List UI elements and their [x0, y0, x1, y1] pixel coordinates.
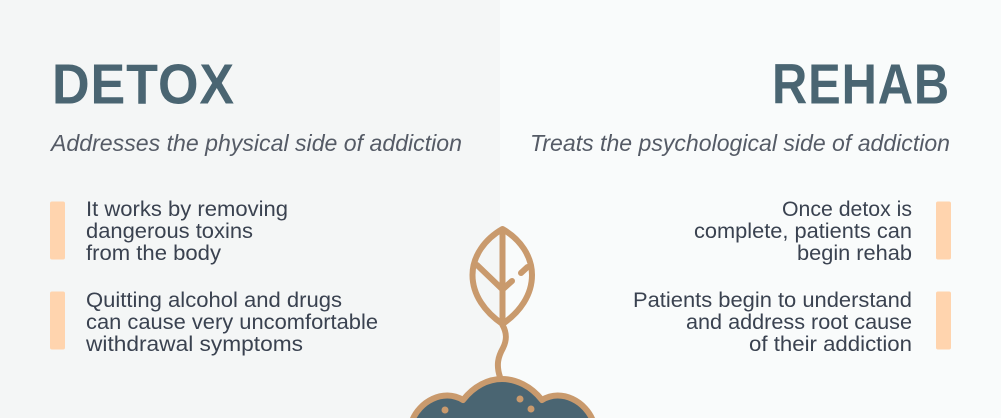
text block: rehab point 1: begin rehab — [797, 241, 912, 265]
text block: detox point 1: from the body — [86, 241, 221, 265]
text block: rehab point 2: of their addiction — [749, 332, 912, 356]
text block: rehab point 1 — [694, 197, 912, 265]
icon: soil mound — [412, 379, 593, 418]
text block: rehab point 1: Once detox is — [782, 197, 912, 221]
text block: rehab point 2: Patients begin to understand — [633, 288, 912, 312]
text block: rehab point 1: complete, patients can — [694, 219, 912, 243]
panel: detox background — [0, 0, 500, 418]
text block: detox point 2 — [85, 288, 378, 356]
text block: detox point 1: It works by removing — [86, 197, 288, 221]
text block: rehab point 2 — [633, 288, 912, 356]
title: detox: DETOX — [52, 52, 235, 116]
text block: detox point 1: dangerous toxins — [86, 219, 253, 243]
accent bar: rehab 2 — [936, 292, 951, 350]
text block: detox point 2: can cause very uncomfortable — [86, 310, 378, 334]
text block: detox point 1 — [86, 197, 288, 265]
icon: plant growing from soil — [412, 229, 593, 418]
text block: detox point 2: withdrawal symptoms — [85, 332, 303, 356]
accent bar: detox 1 — [50, 202, 65, 260]
icon: leaf — [472, 229, 532, 324]
accent bar: rehab 1 — [936, 202, 951, 260]
subtitle: detox: Addresses the physical side of addiction — [49, 130, 462, 156]
subtitle: rehab: Treats the psychological side of addiction — [530, 130, 950, 156]
icon: stem — [498, 325, 506, 377]
text block: rehab point 2: and address root cause — [686, 310, 912, 334]
title: rehab: REHAB — [772, 52, 950, 116]
accent bar: detox 2 — [50, 292, 65, 350]
text block: detox point 2: Quitting alcohol and drugs — [86, 288, 342, 312]
